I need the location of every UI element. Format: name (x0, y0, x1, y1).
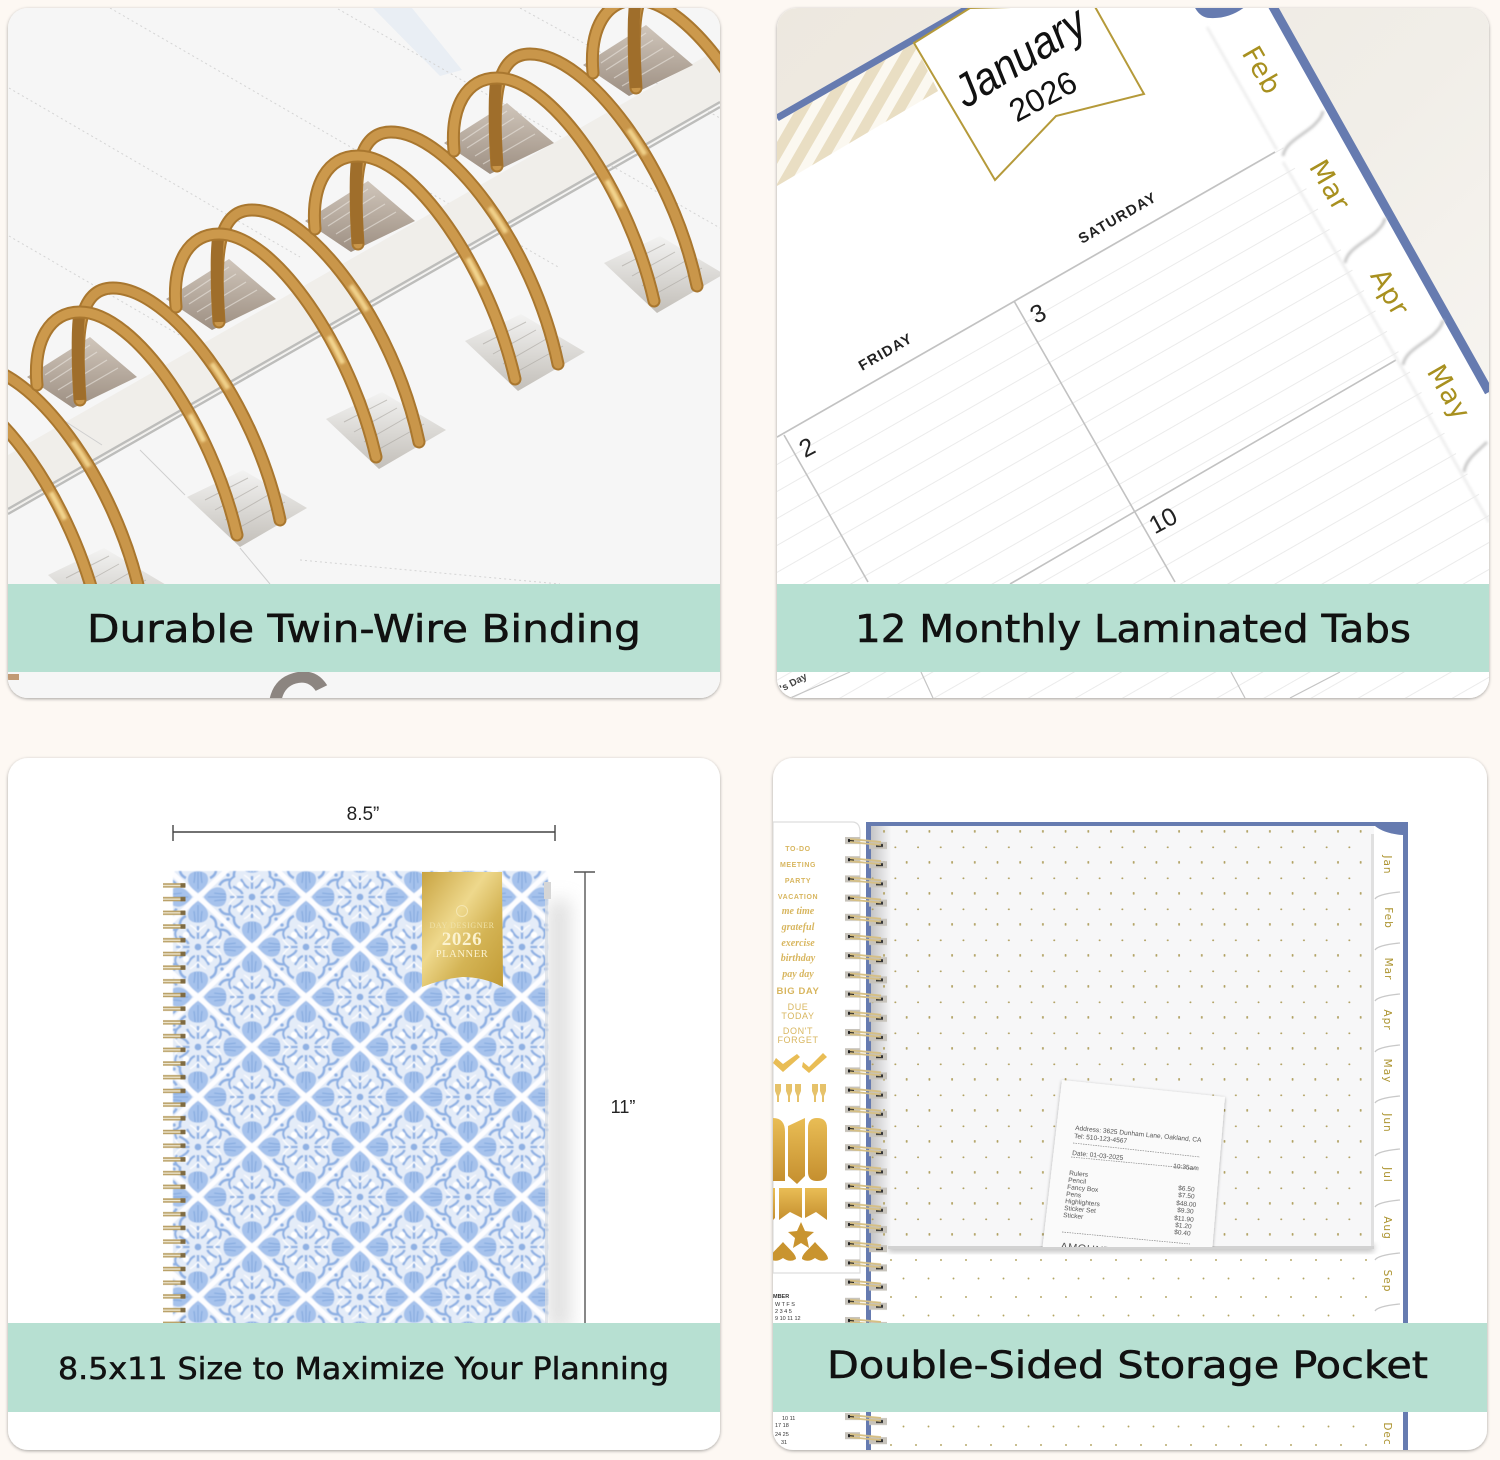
gold label (422, 872, 503, 987)
sticker sheet: VACATION (778, 894, 818, 901)
sticker sheet: DUE (788, 1002, 808, 1012)
month tabs: Jan (1381, 854, 1393, 875)
strip under banner: 's Day (778, 671, 809, 695)
month tabs: Apr (1381, 1009, 1393, 1031)
month tabs: Dec (1381, 1422, 1393, 1446)
backdrop (777, 8, 1489, 394)
weekday labels (856, 190, 1160, 374)
receipt: $0.40 (1174, 1229, 1191, 1238)
mini calendar: 24 25 (775, 1432, 789, 1438)
month tabs: Jul (1381, 1166, 1393, 1183)
month flag: 2026 (1003, 64, 1083, 129)
receipt: Rulers (1069, 1170, 1089, 1179)
sticker sheet: FORGET (777, 1035, 819, 1045)
month flag (914, 0, 1144, 180)
pocket shadow (888, 1244, 1374, 1252)
planner page with dot grid (866, 822, 1408, 1450)
sticker sheet: TO-DO (785, 846, 811, 853)
sticker sheet: MEETING (780, 862, 816, 869)
planner cover (173, 871, 551, 1331)
mini calendar: 10 11 (782, 1416, 795, 1422)
width dimension: 8.5” (347, 804, 379, 825)
panel: twin-wire binding (6, 7, 722, 701)
date numbers: 3 (1026, 298, 1051, 330)
mini calendar: W T F S (775, 1302, 795, 1308)
weekday labels: FRIDAY (856, 331, 916, 374)
wire binding (845, 836, 889, 1450)
panel: monthly tabs (777, 0, 1489, 698)
sticker sheet: DON'T (783, 1026, 813, 1036)
panel: planner size (8, 758, 720, 1450)
side tabs: Feb (1235, 41, 1287, 101)
mini calendar: 9 10 11 12 (775, 1316, 801, 1322)
gold label: 2026 (442, 929, 482, 950)
receipt: 10:35am (1173, 1163, 1200, 1172)
sticker sheet: birthday (781, 953, 816, 964)
receipt (1042, 1080, 1225, 1258)
sticker sheet: grateful (781, 922, 815, 933)
strip under banner (778, 671, 1340, 698)
sticker sheet: PARTY (785, 878, 811, 885)
month tabs: May (1381, 1059, 1393, 1083)
receipt: Pencil (1068, 1177, 1087, 1186)
month tabs: Jun (1381, 1112, 1393, 1133)
banner (777, 584, 1489, 672)
planner page photo with binding coils (8, 8, 720, 584)
month tabs: Mar (1382, 958, 1394, 980)
date numbers (795, 298, 1182, 540)
strip under banner with page number: 6 (242, 632, 368, 817)
receipt: AMOUNT (1060, 1241, 1111, 1258)
receipt: Fancy Box (1067, 1184, 1099, 1194)
panel: storage pocket (770, 758, 1487, 1450)
receipt: Address: 3625 Dunham Lane, Oakland, CA (1075, 1125, 1202, 1144)
mini calendar: MBER (773, 1294, 789, 1300)
receipt: Sticker (1063, 1212, 1084, 1221)
receipt: $6.50 (1178, 1185, 1195, 1194)
gold label: DAY DESIGNER (429, 921, 495, 930)
banner: Durable Twin-Wire Binding (87, 607, 641, 651)
sticker sheet: TODAY (781, 1011, 815, 1021)
sticker sheet: me time (782, 906, 815, 917)
month tabs: Feb (1382, 907, 1394, 929)
receipt: Pens (1066, 1191, 1082, 1199)
month tabs: Aug (1381, 1216, 1393, 1240)
mini calendar: 31 (781, 1440, 787, 1446)
calendar page (777, 5, 1489, 698)
receipt: Sticker Set (1064, 1205, 1096, 1215)
receipt: $9.30 (1177, 1207, 1194, 1216)
side tabs (1207, 27, 1489, 522)
cover shadow (548, 900, 570, 1330)
strip under banner with page number (8, 672, 328, 698)
date numbers: 2 (795, 432, 820, 464)
receipt: Highlighters (1065, 1198, 1101, 1208)
weekday labels: SATURDAY (1076, 190, 1160, 247)
receipt: $11.90 (1174, 1215, 1194, 1224)
width dimension (173, 804, 555, 841)
wire coil (163, 882, 186, 1323)
side tabs: May (1420, 360, 1476, 426)
banner (773, 1323, 1487, 1412)
gold label: PLANNER (436, 949, 488, 960)
month tabs: Sep (1381, 1270, 1393, 1292)
sticker sheet: BIG DAY (777, 986, 820, 997)
mini calendar: 2 3 4 5 (775, 1309, 792, 1315)
side tabs: Mar (1302, 155, 1356, 217)
receipt: Date: 01-03-2025 (1072, 1150, 1124, 1162)
banner: 8.5x11 Size to Maximize Your Planning (58, 1352, 669, 1387)
side tabs: Apr (1364, 263, 1415, 322)
banner: Double-Sided Storage Pocket (827, 1344, 1428, 1387)
receipt: $1.20 (1175, 1222, 1192, 1231)
sticker sheet (770, 822, 860, 1273)
receipt: $7.50 (1178, 1192, 1195, 1201)
sticker sheet: exercise (781, 938, 815, 949)
banner (8, 584, 720, 672)
banner (8, 1323, 720, 1412)
mini calendar (773, 1294, 801, 1446)
mini calendar: 17 18 (775, 1423, 789, 1429)
date numbers: 10 (1144, 502, 1182, 540)
height dimension: 11” (611, 1097, 635, 1117)
sticker sheet: pay day (781, 969, 814, 980)
height dimension (574, 872, 635, 1323)
clear storage pocket (871, 826, 1374, 1249)
receipt: Tel: 510-123-4567 (1074, 1133, 1128, 1145)
banner: 12 Monthly Laminated Tabs (855, 607, 1411, 651)
receipt: $48.00 (1176, 1200, 1197, 1209)
month tabs (1375, 854, 1400, 1446)
